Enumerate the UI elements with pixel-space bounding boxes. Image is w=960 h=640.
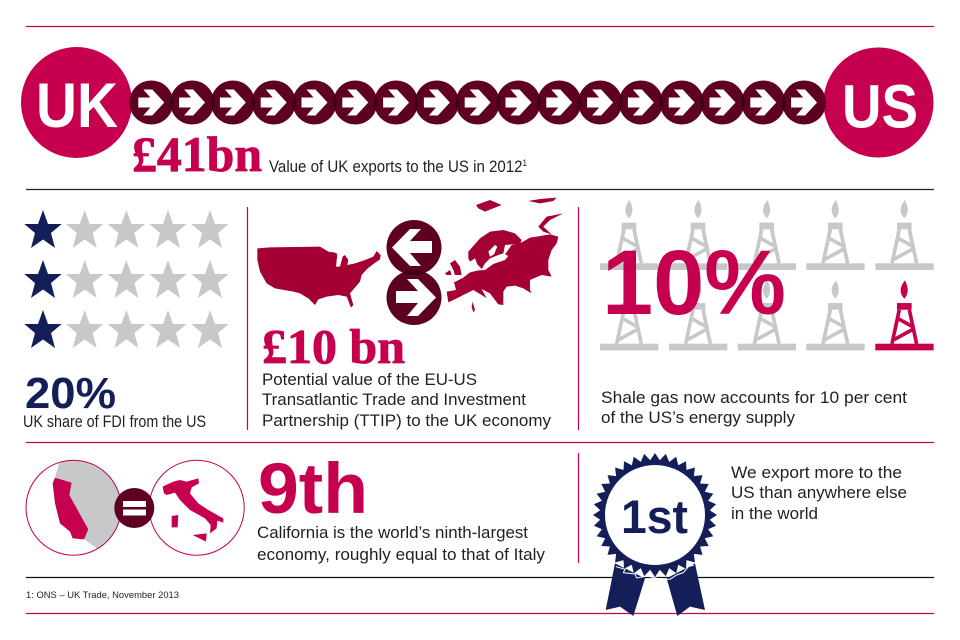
arrow chain from UK to US — [129, 80, 826, 124]
text: California description — [257, 523, 545, 564]
text: export description — [731, 463, 907, 523]
heading: 20%: 20% — [25, 369, 116, 418]
text: shale gas description: of the US’s energy supply — [601, 408, 795, 427]
text: California description: economy, roughly equal to that of Italy — [257, 545, 545, 564]
text: TTIP description: Potential value of the EU-US — [262, 370, 477, 389]
panel: FDI share — [23, 210, 229, 431]
icon: UK circle — [21, 47, 132, 158]
icon: star rating rows — [24, 210, 229, 348]
icon: California map circle — [26, 460, 123, 555]
map: Europe — [445, 198, 563, 312]
icon: gas rigs grid — [600, 200, 934, 350]
heading: £41bn: £41bn — [132, 126, 262, 182]
panel: California and Italy — [26, 450, 545, 564]
text: value of exports: 1 — [523, 158, 527, 168]
text: export description: US than anywhere else — [731, 483, 907, 502]
heading: 9th: 9th — [258, 450, 368, 529]
icon: rosette with ribbon — [593, 453, 717, 616]
text: TTIP description: Transatlantic Trade and Investment — [262, 390, 526, 409]
text: value of exports: Value of UK exports to the US in 2012 — [269, 157, 555, 176]
heading: £10 bn: £10 bn — [262, 319, 405, 374]
icon: US circle — [824, 48, 934, 158]
text: shale gas description: Shale gas now accounts for 10 per cent — [601, 388, 907, 407]
panel: first place export — [593, 453, 907, 616]
panel: TTIP — [257, 198, 563, 430]
panel: shale gas — [600, 200, 934, 427]
icon: Italy map circle — [149, 460, 244, 555]
text: export description: We export more to the — [731, 463, 902, 482]
map: United States — [257, 247, 381, 308]
text: 1st: 1st — [621, 490, 688, 543]
icon: UK circle: UK — [36, 71, 118, 141]
text: UK share of FDI: UK share of FDI from the US — [23, 412, 206, 431]
text: California description: California is the world’s ninth-largest — [257, 523, 528, 542]
icon: highlighted gas rig — [875, 280, 934, 350]
text: TTIP description: Partnership (TTIP) to the UK economy — [262, 411, 551, 430]
icon: US circle: US — [842, 72, 918, 140]
footnote: 1: ONS – UK Trade, November 2013 — [26, 590, 179, 601]
icon: equals sign — [114, 488, 154, 528]
heading: 10%: 10% — [602, 232, 786, 334]
text: export description: in the world — [731, 504, 818, 523]
panel: UK to US exports — [21, 47, 934, 182]
icon: two-way arrows — [386, 220, 442, 325]
text: shale gas description — [601, 388, 907, 427]
text: TTIP description — [262, 370, 551, 430]
